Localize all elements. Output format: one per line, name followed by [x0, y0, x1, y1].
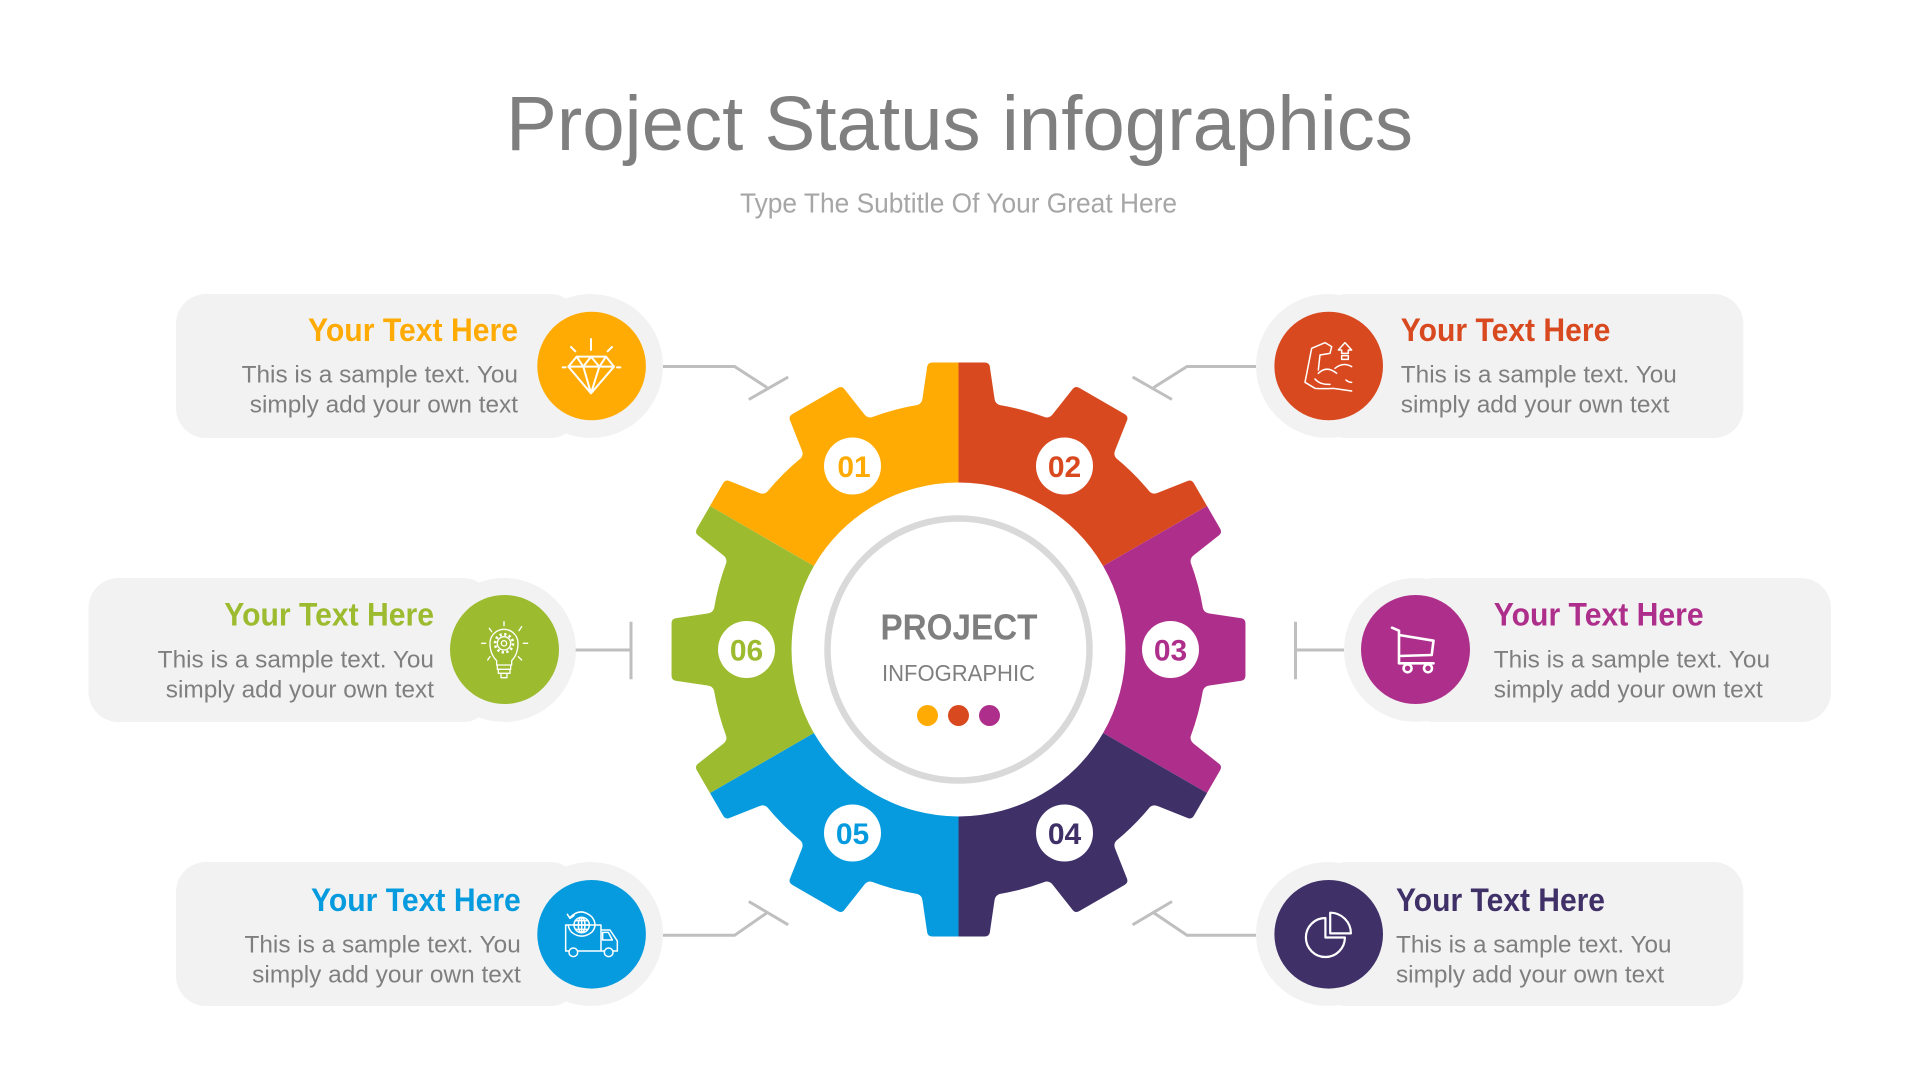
number badge 02: 02 [1048, 451, 1081, 484]
number badge 04: 04 [1048, 818, 1081, 851]
heading 04: Your Text Here [1396, 882, 1605, 918]
heading 05: Your Text Here [311, 882, 521, 918]
number badge 02 [1036, 438, 1093, 494]
panel: item 01 [176, 294, 788, 438]
icon: delivery truck with globe [566, 912, 617, 957]
gear segment 03 [1031, 506, 1331, 823]
icon circle 04 [1274, 880, 1383, 989]
panel: item 03 [1296, 578, 1831, 722]
connector 03 [1296, 622, 1344, 679]
number badge 05 [824, 804, 881, 862]
subtitle: Type The Subtitle Of Your Great Here [740, 188, 1177, 219]
body text 04 [1396, 931, 1672, 988]
body text 04: This is a sample text. You [1396, 931, 1672, 958]
body text 03: simply add your own text [1494, 676, 1763, 703]
gear segment 06 [586, 476, 886, 793]
body text 04: simply add your own text [1396, 961, 1665, 988]
connector 02 [1133, 366, 1256, 400]
heading 06: Your Text Here [224, 597, 434, 633]
icon circle 03 [1361, 595, 1470, 704]
body text 06: simply add your own text [166, 676, 434, 703]
body text 06: This is a sample text. You [158, 647, 434, 674]
gear segment 04 [907, 691, 1207, 1008]
icon: shopping cart [1392, 628, 1434, 672]
icon: pie chart [1306, 913, 1351, 957]
gear diagram [586, 291, 1331, 1008]
number badge 01 [824, 438, 881, 494]
gear segment 01 [710, 291, 1010, 608]
number badge 06 [718, 621, 775, 678]
icon: light bulb with gear [482, 622, 528, 678]
connector 04 [1133, 902, 1256, 935]
heading 01: Your Text Here [308, 312, 518, 348]
icon circle 01 [537, 312, 646, 420]
body text 01: simply add your own text [250, 391, 518, 418]
number badge 01: 01 [837, 451, 871, 484]
centre heading: PROJECT [880, 607, 1038, 648]
panel: item 04 [1133, 862, 1743, 1006]
gear segment 05 [710, 733, 958, 936]
connector 05 [663, 902, 788, 935]
panel: item 05 [176, 862, 788, 1006]
icon: diamond [563, 339, 620, 393]
number badge 06: 06 [730, 634, 763, 668]
icon circle 06 [450, 595, 559, 704]
body text 01 [242, 361, 518, 418]
body text 02: simply add your own text [1401, 391, 1670, 418]
panel: item 02 [1133, 294, 1743, 438]
body text 03: This is a sample text. You [1494, 647, 1770, 674]
icon circle 05 [537, 880, 646, 989]
body text 05: This is a sample text. You [244, 931, 521, 958]
body text 01: This is a sample text. You [242, 361, 518, 388]
body text 03 [1494, 647, 1770, 703]
number badge 03 [1142, 621, 1199, 678]
centre ring [828, 518, 1090, 780]
connector 01 [663, 366, 788, 400]
centre subheading: INFOGRAPHIC [882, 660, 1035, 686]
heading 03: Your Text Here [1494, 597, 1704, 633]
title: Project Status infographics [506, 81, 1413, 167]
body text 06 [158, 647, 434, 703]
number badge 05: 05 [836, 818, 869, 851]
body text 05: simply add your own text [252, 961, 521, 988]
panel: item 06 [88, 578, 631, 722]
gear segment 02 [958, 362, 1207, 566]
body text 02: This is a sample text. You [1401, 361, 1677, 388]
body text 05 [244, 931, 521, 988]
number badge 03: 03 [1154, 634, 1187, 668]
heading 02: Your Text Here [1401, 312, 1610, 348]
icon circle 02 [1274, 312, 1383, 420]
number badge 04 [1036, 804, 1093, 862]
connector 06 [576, 622, 631, 679]
body text 02 [1401, 361, 1677, 418]
centre dots [917, 705, 1000, 726]
icon: muscle arm [1305, 343, 1352, 391]
